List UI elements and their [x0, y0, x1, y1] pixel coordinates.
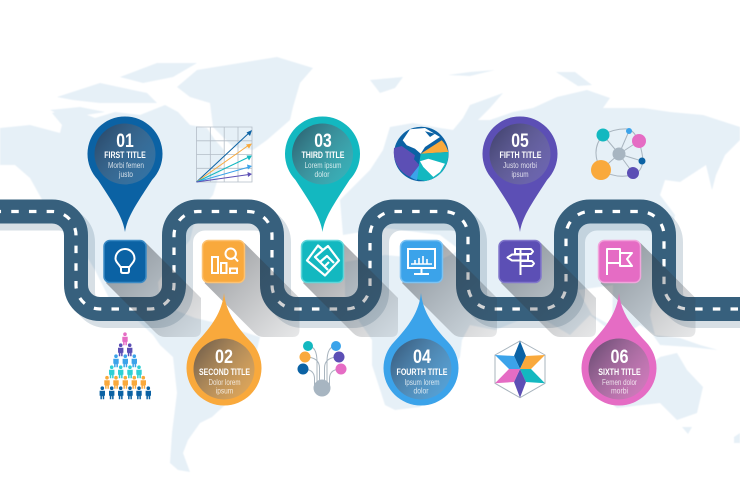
pin 02: SECOND TITLE: [199, 367, 250, 377]
pin 04: [384, 293, 458, 406]
pin 01: 01: [116, 131, 134, 152]
icon: handshake: [302, 240, 344, 282]
pin 06: 06: [610, 347, 628, 368]
pin 03: dolor: [314, 170, 330, 179]
pin 05: FIFTH TITLE: [500, 150, 542, 160]
icon: light bulb: [104, 240, 146, 282]
icon: monitor: [400, 240, 442, 282]
pin 04: Ipsum lorem: [404, 378, 440, 387]
pin 01: Morbi femen: [108, 161, 144, 170]
network diagram: [591, 128, 646, 180]
pin 05: 05: [511, 131, 529, 152]
pin 03: [285, 116, 360, 232]
pin 04: 04: [413, 347, 431, 368]
pin 01: FIRST TITLE: [104, 150, 146, 160]
pin 04: dolor: [414, 386, 429, 396]
pin 02: Dolor lorem: [208, 378, 241, 387]
hexagon star: [495, 341, 545, 398]
pin 06: [582, 293, 657, 406]
pin 01: [88, 116, 162, 232]
icon: chart with magnifier: [202, 240, 244, 282]
branching tree diagram: [298, 341, 346, 396]
icon: flag: [598, 240, 640, 282]
pin 05: Justo morbi: [503, 161, 537, 170]
road: [0, 212, 740, 309]
pin 02: 02: [215, 347, 233, 368]
pin 04: FOURTH TITLE: [396, 367, 448, 377]
pin 02: ipsum: [216, 386, 234, 396]
pin 02: [186, 293, 262, 406]
pin 01: justo: [118, 170, 133, 179]
growth line chart: [196, 127, 252, 182]
pin 06: SIXTH TITLE: [598, 367, 641, 377]
pin 06: morbi: [611, 386, 628, 396]
pin 05: ipsum: [512, 170, 529, 179]
pin 03: Lorem ipsum: [304, 161, 342, 170]
pin 03: THIRD TITLE: [302, 150, 344, 160]
pin 06: Femen dolor: [602, 378, 637, 387]
icon: signpost: [499, 240, 541, 282]
pin 03: 03: [314, 131, 332, 152]
long icon shadows: [106, 243, 696, 337]
road shadow: [0, 218, 740, 316]
globe pie chart: [394, 127, 449, 181]
pin 05: [482, 116, 558, 232]
people pyramid: [100, 332, 151, 399]
